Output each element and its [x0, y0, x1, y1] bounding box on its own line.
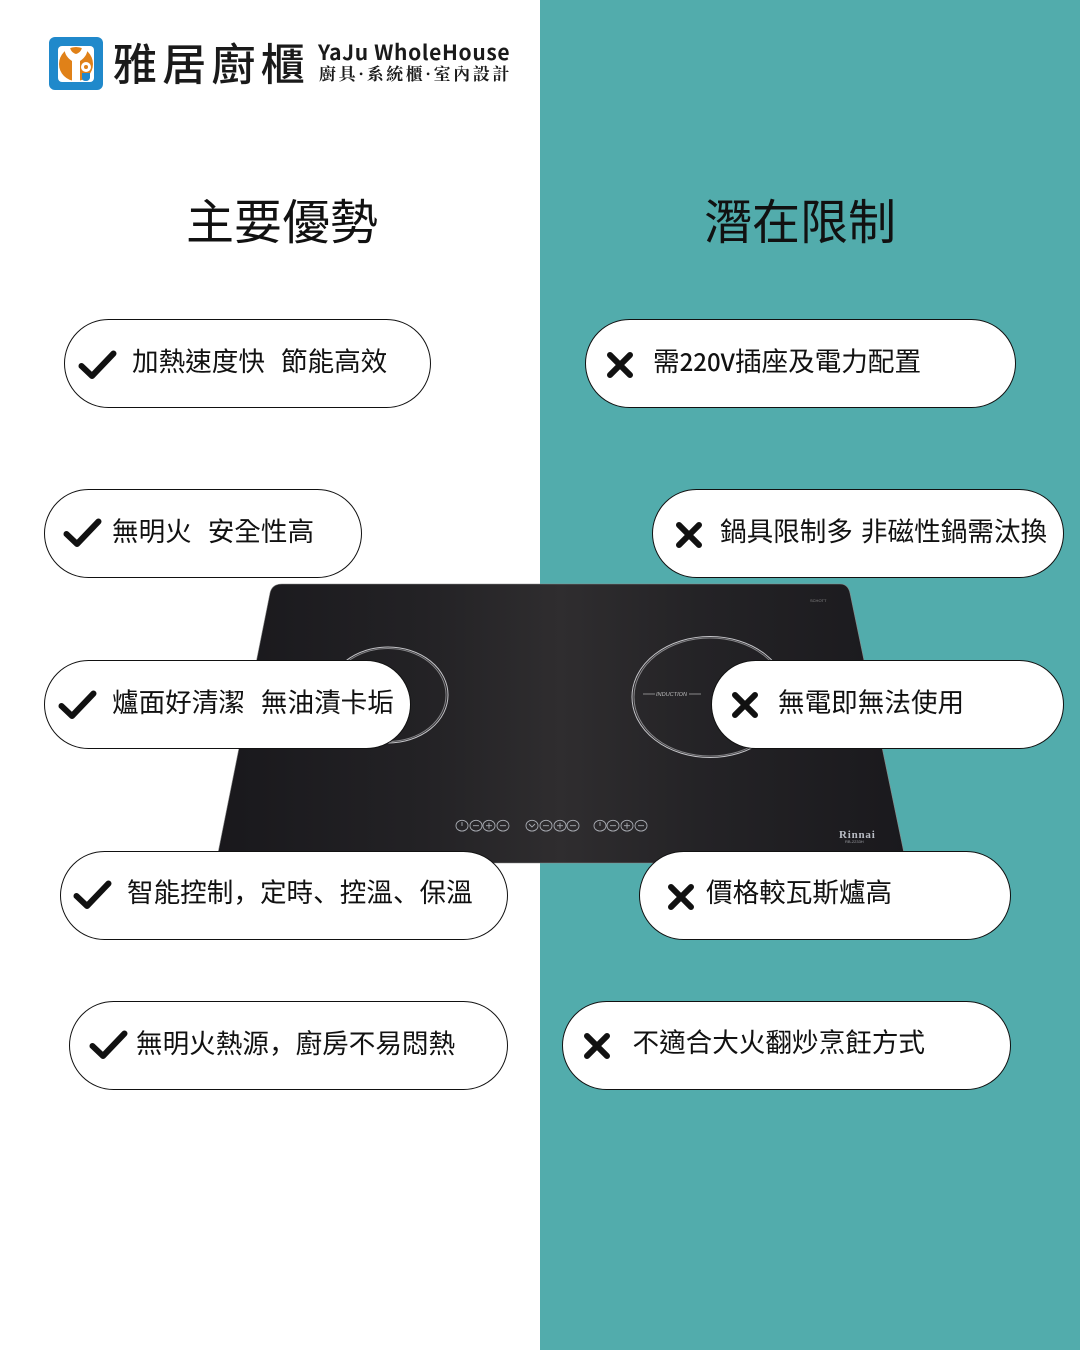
logo icon: [49, 37, 103, 90]
text: 價格較瓦斯爐高: [706, 871, 892, 910]
icon: check: [58, 690, 96, 719]
heading: limitations: 潛在限制: [704, 183, 896, 253]
icon: check: [78, 350, 116, 379]
pill: 220V: [585, 319, 1016, 408]
text: 智能控制，定時、控溫、保溫: [127, 871, 473, 910]
induction label: [643, 692, 701, 698]
pill: stir fry: [562, 1001, 1011, 1090]
text: 無電即無法使用: [778, 681, 964, 720]
text: 無明火熱源，廚房不易悶熱: [136, 1022, 455, 1061]
brand mark: RB-2233H: [845, 839, 864, 844]
pill: no flame: [44, 489, 362, 578]
induction label: INDUCTION: [656, 692, 688, 698]
text: 無明火 安全性高: [112, 510, 314, 549]
logo: [49, 29, 512, 93]
text: 加熱速度快 節能高效: [132, 340, 387, 379]
logo tagline: 廚具·系統櫃·室內設計: [319, 60, 512, 85]
text: 鍋具限制多 非磁性鍋需汰換: [720, 510, 1047, 549]
pill: fast heating: [64, 319, 431, 408]
teal right background panel: [540, 0, 1080, 1350]
induction cooktop: [218, 584, 904, 864]
icon: cross: [732, 692, 758, 718]
pill: cool kitchen: [69, 1001, 508, 1090]
pill: cookware: [652, 489, 1064, 578]
touch controls: [456, 820, 647, 831]
glass mark: SCHOTT: [810, 598, 827, 603]
icon: cross: [584, 1033, 610, 1059]
logo wordmark: 雅居廚櫃: [113, 29, 310, 93]
icon: cross: [668, 884, 694, 910]
text: 爐面好清潔 無油漬卡垢: [112, 681, 394, 720]
text: 需220V插座及電力配置: [653, 340, 921, 379]
brand mark: Rinnai: [839, 829, 876, 841]
icon: check: [74, 880, 112, 909]
logo english name: YaJu WholeHouse: [318, 37, 510, 67]
heading: advantages: 主要優勢: [186, 183, 378, 253]
pill: power dependency: [711, 660, 1064, 749]
pill: easy clean: [44, 660, 411, 749]
pill: price: [639, 851, 1011, 940]
icon: cross: [607, 352, 633, 378]
burner rings: [328, 636, 788, 758]
icon: check: [90, 1030, 128, 1059]
icon: check: [64, 518, 102, 547]
text: 不適合大火翻炒烹飪方式: [632, 1021, 925, 1060]
icon: cross: [676, 522, 702, 548]
pill: smart control: [60, 851, 508, 940]
